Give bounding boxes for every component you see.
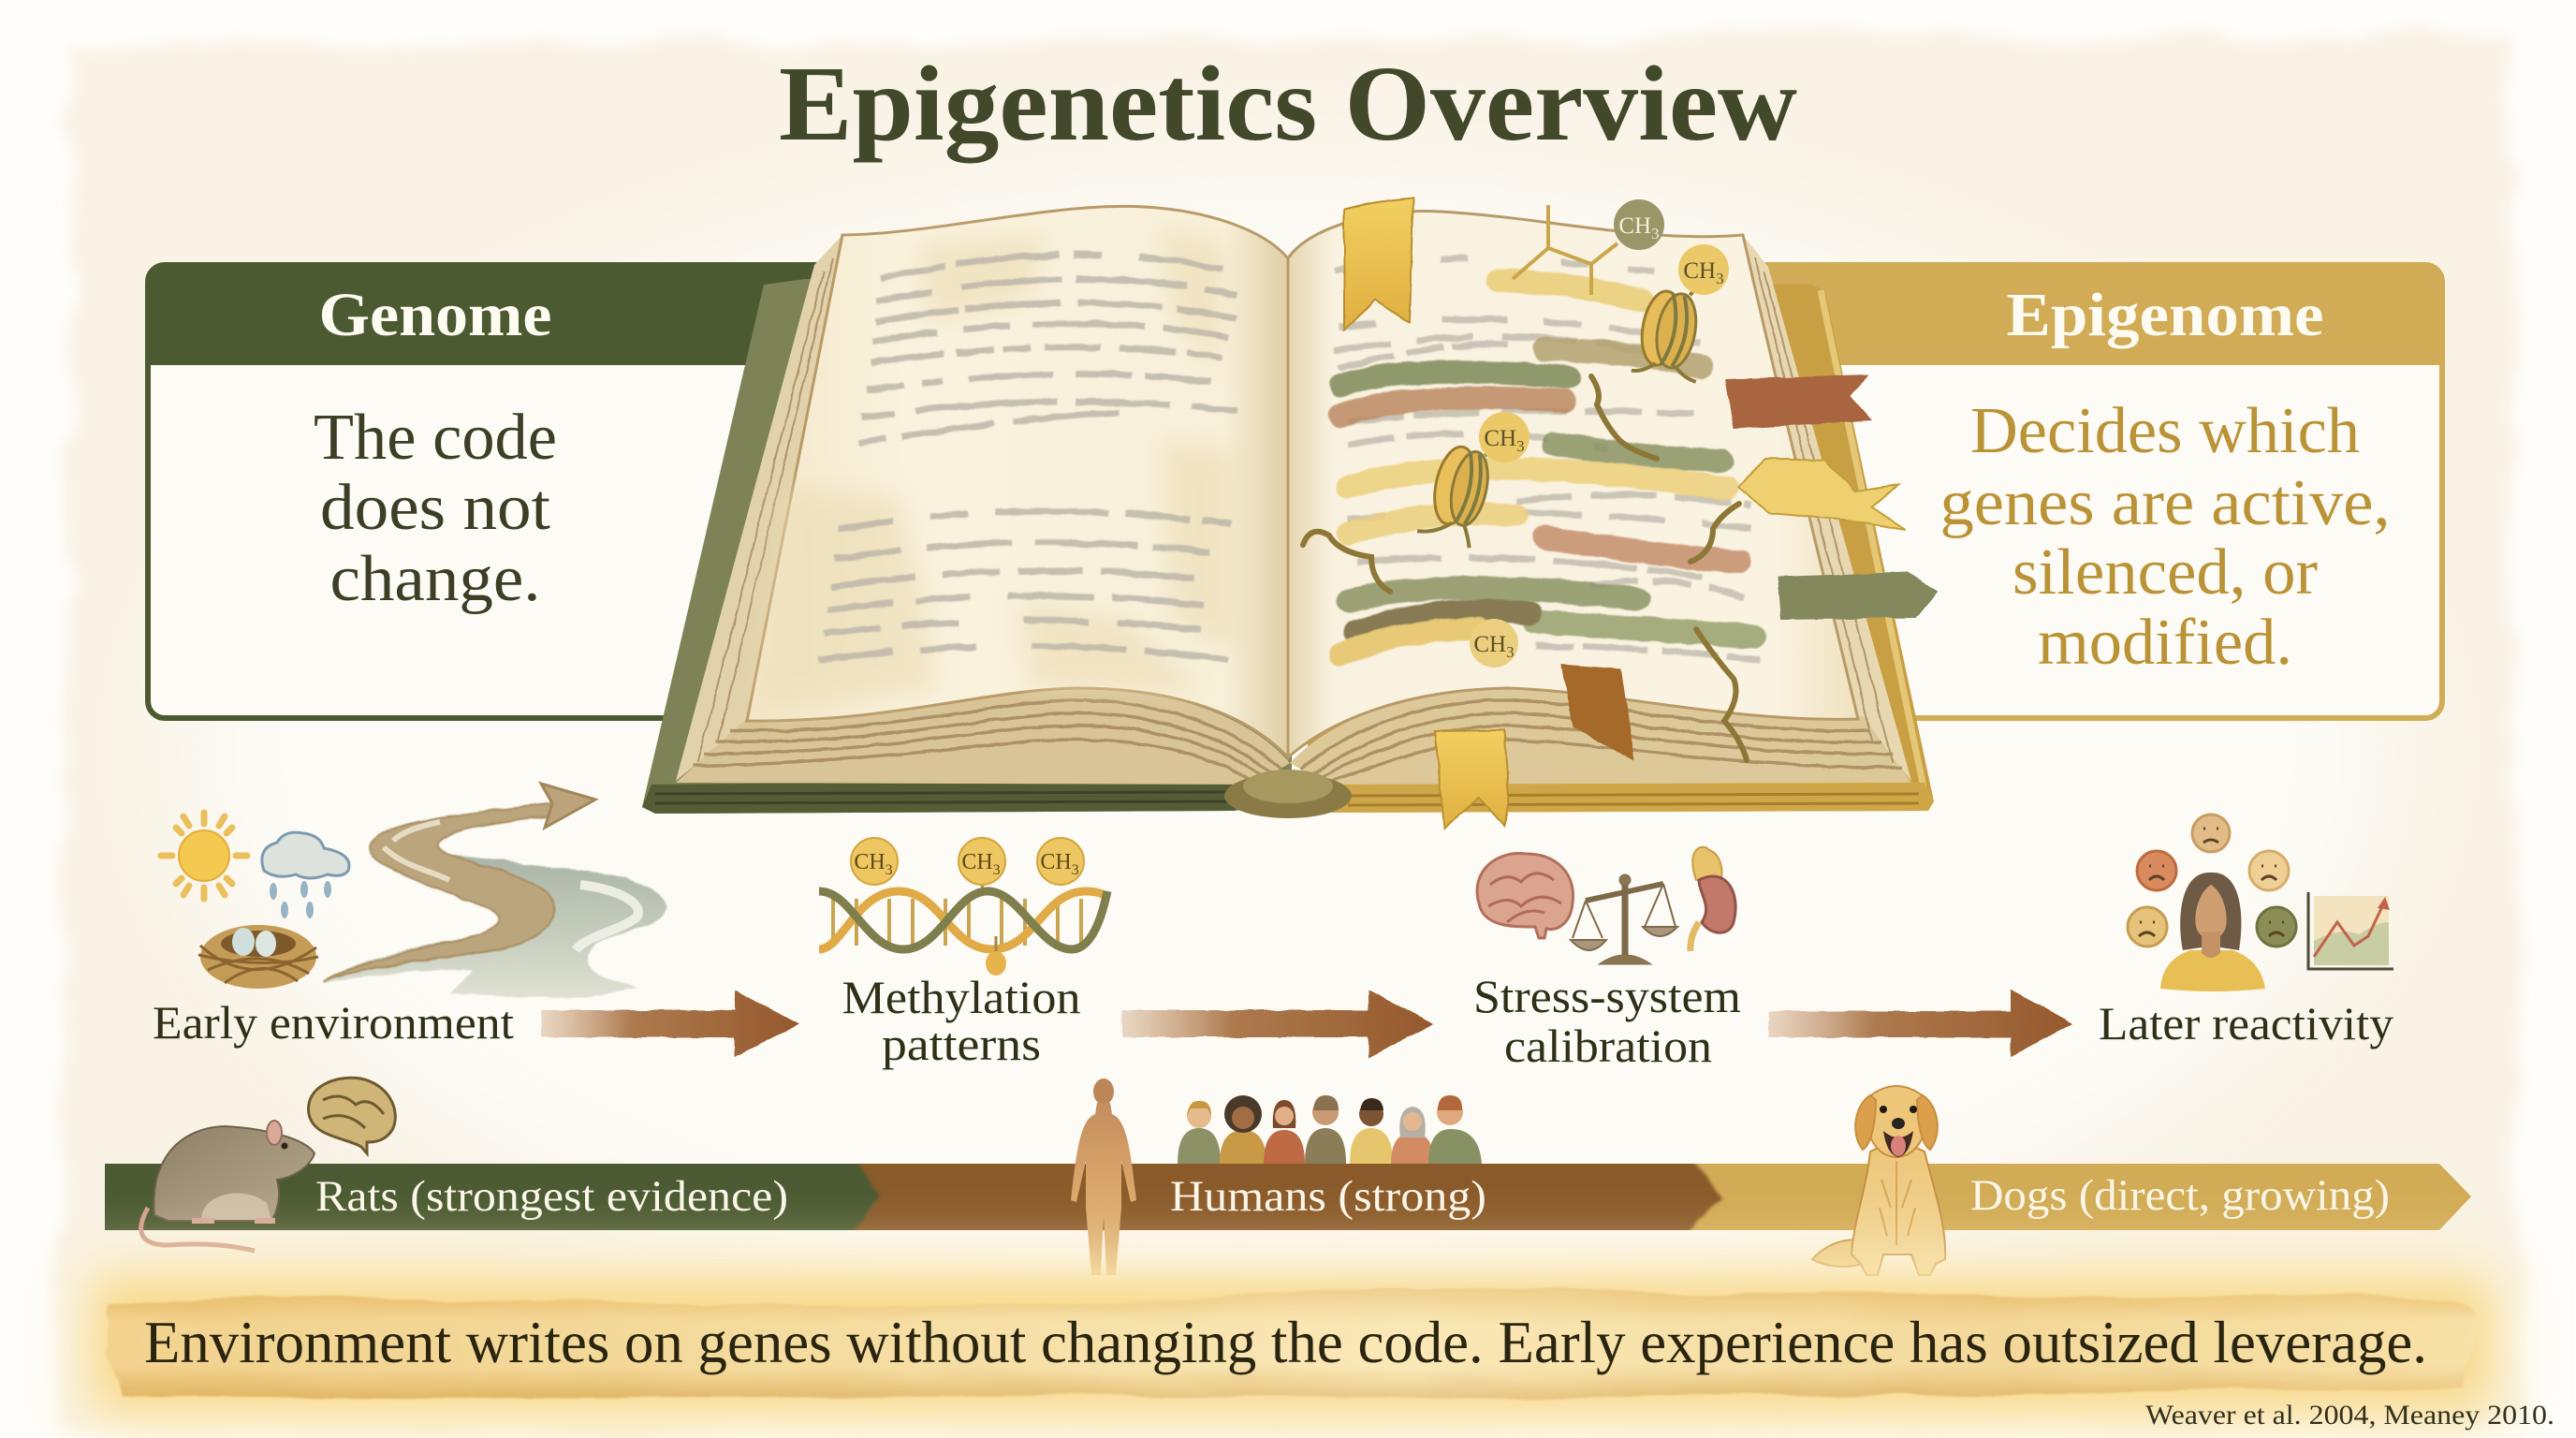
rats label: Rats (strongest evidence)	[315, 1172, 788, 1221]
icon: woman	[2160, 873, 2265, 991]
label	[842, 971, 1080, 1070]
label: calibration	[1504, 1020, 1712, 1072]
genome text	[314, 402, 557, 615]
icon: rat	[141, 1121, 315, 1251]
highlighted gene bands	[1340, 281, 1755, 655]
histone wraps	[1416, 260, 1716, 551]
flow step 2: methylation patterns	[819, 838, 1107, 1070]
arrow 1	[541, 990, 799, 1057]
right page	[1288, 198, 1938, 829]
icon: nest	[198, 925, 318, 989]
label: patterns	[882, 1018, 1041, 1070]
icon: sun	[161, 813, 247, 899]
panel: genome	[146, 263, 992, 718]
label: Early environment	[153, 996, 514, 1049]
epigenome text	[1939, 395, 2391, 679]
molecular branch	[1513, 205, 1617, 295]
takeaway text: Environment writes on genes without changing the code. Early experience has outsized leverage.	[144, 1310, 2427, 1375]
genome text: The code	[314, 402, 557, 474]
icon: emotion faces	[2128, 814, 2296, 946]
left page	[747, 206, 1288, 757]
icon: balance scale	[1571, 874, 1677, 964]
takeaway banner	[84, 1264, 2499, 1428]
epigenome text: silenced, or	[2012, 536, 2318, 609]
bookmarks	[1344, 198, 1938, 829]
CH3 tags on page: 3	[1516, 437, 1525, 455]
icon: rising chart	[2308, 892, 2393, 969]
left page text lines	[818, 255, 1240, 660]
dogs label: Dogs (direct, growing)	[1970, 1171, 2390, 1220]
CH3 tags on page: 3	[1506, 643, 1515, 661]
icon: DNA helix with CH3: 3	[886, 862, 893, 878]
CH3 tags on page: CH	[1683, 258, 1716, 284]
icon: brain	[1477, 854, 1573, 938]
arrow 3	[1768, 990, 2072, 1057]
panel: epigenome	[1591, 263, 2444, 718]
CH3 tags on page: CH	[1484, 426, 1516, 451]
label: Stress-system	[1473, 970, 1741, 1022]
label: Methylation	[842, 971, 1080, 1023]
icon: DNA helix with CH3: CH	[1040, 850, 1072, 874]
icon: crowd	[1178, 1095, 1482, 1164]
icon: DNA helix with CH3	[819, 838, 1107, 976]
CH3 tags on page: 3	[1651, 225, 1660, 242]
icon: golden retriever	[1812, 1086, 1945, 1275]
flow step 1: early environment	[153, 784, 666, 1049]
CH3 tags on page: CH	[1618, 213, 1651, 239]
icon: human figure	[1071, 1078, 1136, 1275]
evidence bar	[105, 1164, 2471, 1230]
label: Later reactivity	[2099, 997, 2393, 1049]
spine bump	[1224, 770, 1352, 818]
epigenome text: genes are active,	[1939, 467, 2391, 539]
epigenome heading: Epigenome	[2007, 281, 2323, 349]
squiggly tails	[1303, 376, 1747, 760]
icon: rat brain	[309, 1078, 395, 1153]
genome text: does not	[320, 472, 551, 544]
CH3 tags on page: 3	[1716, 270, 1724, 287]
page stacks	[676, 235, 1911, 785]
icon: DNA helix with CH3: 3	[993, 862, 1001, 878]
title: Epigenetics Overview	[779, 44, 1797, 163]
epigenome text: modified.	[2038, 607, 2292, 679]
flow step 4: later reactivity	[2099, 814, 2393, 1049]
icon: DNA helix with CH3: CH	[854, 850, 886, 874]
label	[1473, 970, 1741, 1072]
citation: Weaver et al. 2004, Meaney 2010.	[2145, 1400, 2554, 1431]
humans label: Humans (strong)	[1170, 1172, 1486, 1221]
CH3 tags on page: CH	[1473, 632, 1506, 657]
icon: DNA helix with CH3: 3	[1072, 862, 1079, 878]
icon: DNA helix with CH3: CH	[961, 850, 993, 874]
genome text: change.	[329, 543, 541, 615]
icon: rain cloud	[262, 832, 349, 918]
flow step 3: stress-system calibration	[1473, 847, 1741, 1072]
CH3 tags on page	[1470, 199, 1729, 668]
arrow 2	[1122, 990, 1434, 1058]
right page text lines	[1334, 258, 1760, 660]
book cover	[642, 279, 1934, 814]
icon: kidney	[1690, 847, 1735, 951]
epigenome text: Decides which	[1970, 395, 2360, 467]
icon: winding road with arrow	[323, 784, 666, 998]
genome heading: Genome	[318, 281, 552, 349]
